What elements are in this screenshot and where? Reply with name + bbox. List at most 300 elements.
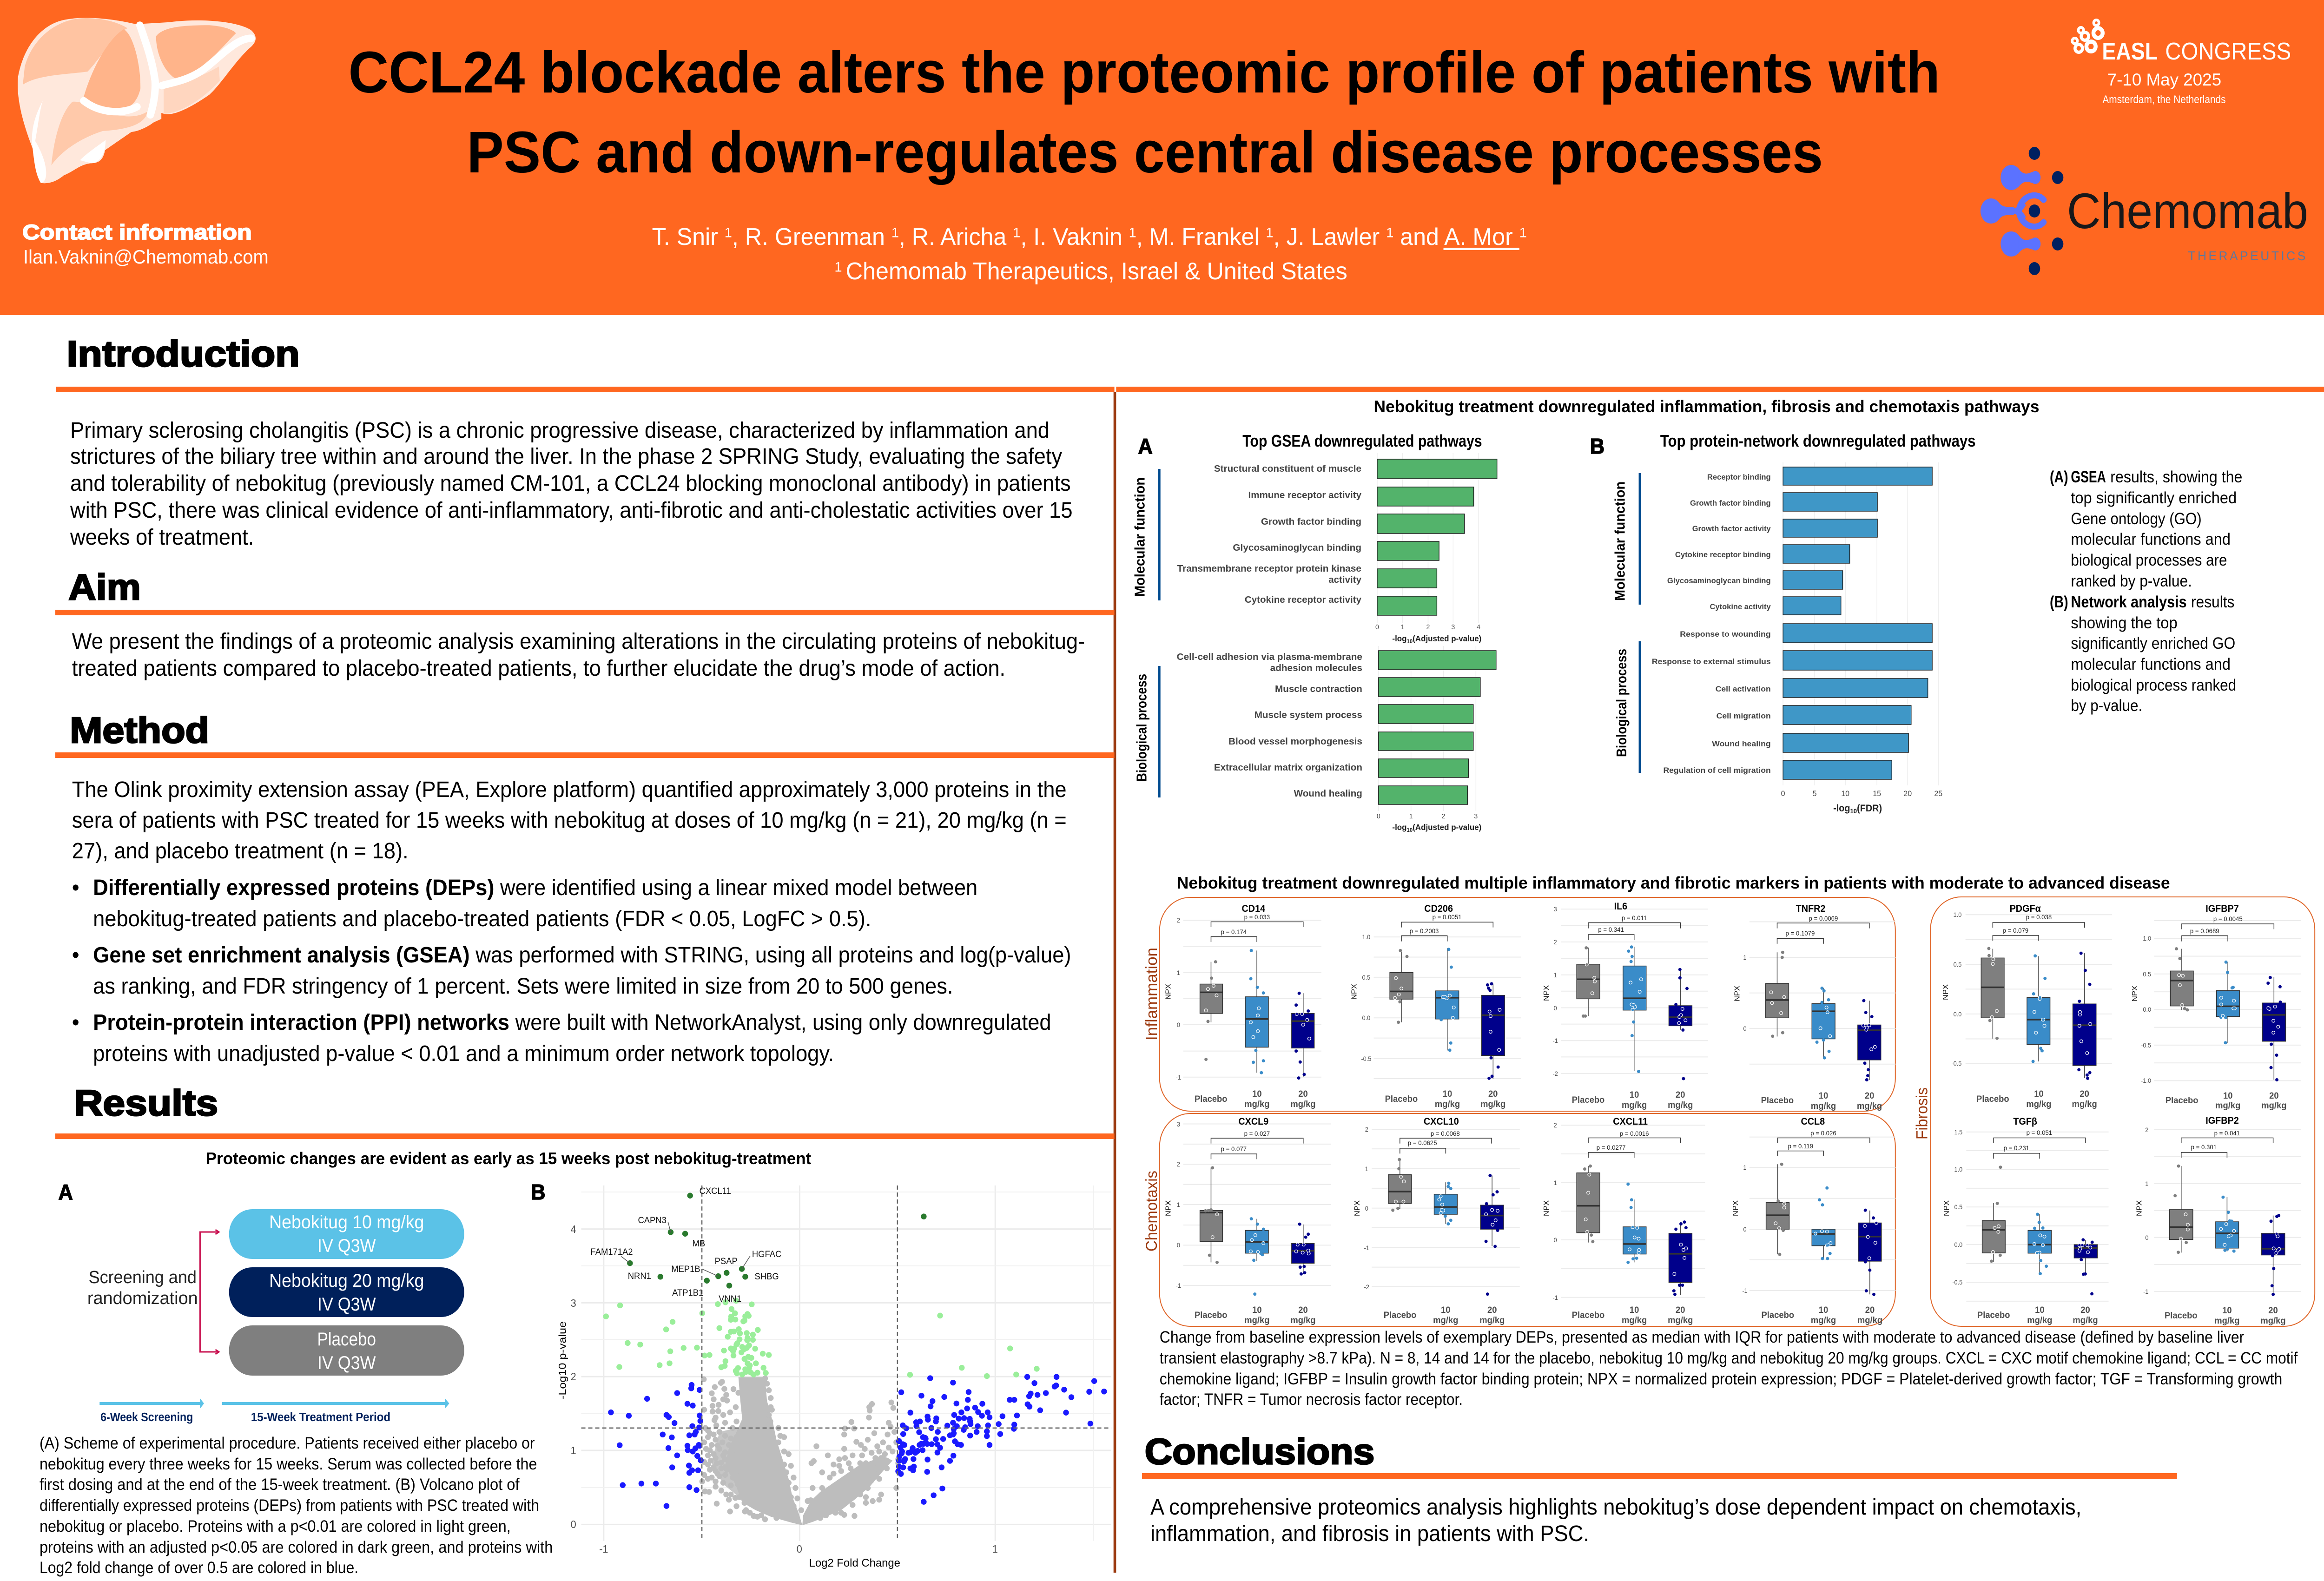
pill: nebokitug 10: Nebokitug 10 mg/kg [269, 1212, 424, 1232]
bars: network: Cytokine activity [1710, 602, 1771, 611]
chart: TNFR2: 20 [1865, 1091, 1874, 1101]
text: panel legend A and B: Gene ontology (GO) [2071, 510, 2202, 528]
volcano labels: ATP1B1 [672, 1288, 703, 1298]
caption: panel A and B: proteins with an adjusted p<0.05 are colored in dark green, and proteins with [40, 1538, 553, 1556]
chart: CCL8: mg/kg [1811, 1316, 1836, 1325]
chart: PDGF alpha: NPX [1941, 984, 1950, 1000]
caption: panel A and B: Log2 fold change of over 0.5 are colored in blue. [40, 1559, 358, 1577]
caption: boxplots: transient elastography >8.7 kPa). N = 8, 14 and 14 for the placebo, nebokitug 10 mg/kg and nebokitug 20 mg/kg groups. CXCL = CXC motif chemokine ligand; CCL = CC motif [1160, 1349, 2298, 1367]
chart: IGFBP7: p = 0.0689 [2190, 928, 2219, 935]
chart: IGFBP7: NPX [2131, 986, 2139, 1001]
Chemomab logo: Chemomab [2067, 183, 2308, 239]
chart: TNFR2: 0 [1743, 1025, 1747, 1032]
chart: CXCL9: -1 [1176, 1282, 1181, 1289]
chart: PDGF alpha: 1.0 [1954, 911, 1961, 918]
chart: CXCL10: 20 [1487, 1305, 1497, 1315]
chart: CXCL10: 1 [1365, 1166, 1368, 1173]
volcano labels: CAPN3 [638, 1216, 667, 1225]
volcano axes [556, 1223, 998, 1569]
chart: PDGF alpha: -0.5 [1951, 1060, 1961, 1067]
heading: introduction: Introduction [66, 334, 300, 374]
chart: CD14: 1 [1177, 969, 1180, 976]
chart: TGF beta: mg/kg [2027, 1316, 2052, 1325]
bars: GSEA molecular function: 10 [1407, 639, 1413, 645]
EASL congress logo [2071, 19, 2291, 105]
chart: CXCL9 [1164, 1117, 1331, 1325]
chart: TNFR2: 1 [1743, 954, 1747, 961]
chart: CCL8 [1731, 1117, 1895, 1325]
chart: CXCL11: mg/kg [1622, 1316, 1647, 1325]
panel: fibrosis [1914, 897, 2315, 1326]
subheading: pathways: Nebokitug treatment downregulated inflammation, fibrosis and chemotaxis pathways [1373, 397, 2039, 416]
text: screening and randomization [87, 1267, 198, 1308]
chart: IGFBP7 [2131, 904, 2301, 1111]
text: panel legend A and B: showing the top [2071, 614, 2178, 632]
text: panel legend A and B: molecular functions and [2071, 655, 2231, 673]
side label: biological process: Biological process [1614, 649, 1630, 757]
chart: PDGF alpha: mg/kg [2072, 1100, 2097, 1109]
bars: network: Growth factor binding [1690, 499, 1771, 507]
text: panel legend A and B: results, showing the [2110, 468, 2242, 486]
Chemomab logo: THERAPEUTICS [2188, 248, 2305, 263]
contact information: Contact information [22, 221, 252, 244]
chart: CD206: mg/kg [1480, 1100, 1505, 1109]
bars: GSEA molecular function: 1 [1401, 624, 1405, 631]
chart: CXCL11: 10 [1630, 1305, 1639, 1315]
panel: chemotaxis [1143, 1113, 1895, 1326]
side label: biological process: Biological process [1134, 674, 1149, 782]
bars: GSEA biological process: 3 [1474, 813, 1478, 820]
chart: IL6: 10 [1630, 1090, 1639, 1100]
chart: TNFR2: mg/kg [1857, 1101, 1882, 1111]
text: screening and randomization: randomization [87, 1288, 198, 1308]
chart: PDGF alpha: p = 0.079 [2003, 927, 2028, 934]
chart: CD206: 1.0 [1362, 934, 1370, 941]
chart: CCL8: mg/kg [1857, 1316, 1882, 1325]
volcano axes: -Log10 p-value [556, 1321, 568, 1399]
bars: GSEA molecular function: Cytokine receptor activity [1245, 595, 1361, 605]
chart: IGFBP2: 2 [2145, 1126, 2148, 1133]
chart: TGF beta: -0.5 [1952, 1279, 1962, 1286]
caption: boxplots: Change from baseline expression levels of exemplary DEPs, presented as median with IQR for patients with moderate to advanced disease (defined by baseline liver [1160, 1328, 2244, 1346]
chart: PDGF alpha: mg/kg [2026, 1100, 2052, 1109]
text: method: sera of patients with PSC treated for 15 weeks with nebokitug at doses of 10 mg/kg (n = 21), 20 mg/kg (n = [72, 808, 1067, 832]
side label: molecular function: Molecular function [1612, 481, 1628, 601]
chart: CD206: CD206 [1424, 904, 1453, 914]
text: panel legend A and B: by p-value. [2071, 697, 2142, 715]
chart: CXCL11: 20 [1676, 1305, 1685, 1315]
bars: GSEA biological process [1177, 646, 1496, 833]
text: method [72, 777, 1071, 1066]
bars: GSEA biological process: -log [1392, 823, 1407, 832]
volcano axes: -1 [599, 1543, 608, 1555]
chart: IGFBP7: Placebo [2166, 1096, 2198, 1106]
section: introduction [56, 334, 1115, 549]
chart: TGF beta: 1.5 [1954, 1129, 1962, 1136]
text: method: The Olink proximity extension assay (PEA, Explore platform) quantified approximately 3,000 proteins in the [72, 777, 1067, 802]
chart: TGF beta [1942, 1117, 2109, 1325]
bars: GSEA biological process: 10 [1407, 827, 1413, 833]
text: method: proteins with unadjusted p-value < 0.01 and a minimum order network topology. [93, 1041, 834, 1066]
section rule: right column [1116, 387, 2324, 392]
bars: GSEA molecular function: 4 [1477, 624, 1480, 631]
authors: 1 Chemomab Therapeutics, Israel & United States [834, 257, 1347, 284]
text: panel legend A and B [2050, 468, 2242, 715]
chart: CXCL10: 10 [1441, 1305, 1450, 1315]
volcano labels: HGFAC [752, 1250, 781, 1259]
bars: GSEA biological process: Muscle system process [1254, 710, 1362, 720]
chart: CCL8: -1 [1742, 1287, 1748, 1294]
caption: panel A and B: first dosing and at the end of the 15-week treatment. (B) Volcano plot of [40, 1476, 520, 1494]
bars: network: 25 [1934, 789, 1942, 798]
bars: GSEA molecular function: Growth factor binding [1261, 517, 1361, 527]
panel B: volcano plot [531, 1181, 1111, 1569]
chart: CD14: NPX [1164, 984, 1172, 1000]
chart: IGFBP2: Placebo [2165, 1311, 2198, 1321]
chart: TNFR2: 10 [1819, 1091, 1828, 1101]
title [348, 40, 1940, 185]
section: aim [55, 567, 1115, 680]
bars: GSEA molecular function: 2 [1426, 624, 1430, 631]
chart: IGFBP7: -0.5 [2141, 1042, 2151, 1049]
bars: GSEA molecular function: Structural constituent of muscle [1214, 464, 1361, 474]
bars: GSEA biological process: (Adjusted p-value) [1413, 823, 1481, 832]
chart: CXCL9: 20 [1298, 1305, 1308, 1315]
caption: panel A and B: nebokitug every three weeks for 15 weeks. Serum was collected before the [40, 1455, 537, 1473]
title: CCL24 blockade alters the proteomic profile of patients with [348, 40, 1940, 105]
section: method [55, 710, 1115, 1066]
heading: method: Method [70, 710, 209, 751]
side label: fibrosis: Fibrosis [1914, 1087, 1931, 1140]
chart: CD14: 0 [1177, 1021, 1180, 1028]
chart: IL6: Placebo [1572, 1095, 1604, 1105]
chart: PDGF alpha: 10 [2034, 1089, 2044, 1099]
bars: network: 10 [1850, 808, 1857, 815]
section: conclusions [1142, 1431, 2177, 1546]
heading: conclusions: Conclusions [1145, 1431, 1374, 1472]
chart: TGF beta: TGFβ [2013, 1117, 2037, 1127]
bars: GSEA biological process: Muscle contraction [1275, 684, 1362, 694]
bars: network: Growth factor activity [1692, 524, 1771, 533]
caption: panel A and B: nebokitug or placebo. Proteins with a p<0.01 are colored in light green, [40, 1517, 511, 1535]
EASL congress logo: 7-10 May 2025 [2107, 70, 2221, 89]
chart: CXCL10: NPX [1353, 1200, 1361, 1216]
chart: IGFBP2: 0 [2145, 1234, 2148, 1241]
panel A: GSEA bars: Top GSEA downregulated pathways [1242, 432, 1482, 450]
chart: CCL8: p = 0.026 [1810, 1130, 1836, 1137]
bars: GSEA biological process: 1 [1409, 813, 1413, 820]
bars: network: Glycosaminoglycan binding [1667, 576, 1771, 585]
chart: IGFBP2 [2135, 1116, 2301, 1326]
bars: network: 20 [1903, 789, 1912, 798]
bars: network: Cytokine receptor binding [1675, 550, 1771, 559]
chart: IGFBP7: p = 0.0045 [2213, 916, 2243, 922]
chart: CXCL9: p = 0.027 [1244, 1130, 1270, 1137]
bars: network: 10 [1841, 789, 1849, 798]
section: results [40, 1083, 1115, 1577]
bars: GSEA biological process: Cell-cell adhesion via plasma-membrane [1177, 652, 1362, 662]
chart: PDGF alpha: PDGFα [2010, 904, 2041, 914]
chart: CD206: 0.5 [1362, 974, 1370, 981]
chart: TNFR2: Placebo [1761, 1096, 1794, 1106]
side label: molecular function [1132, 469, 1161, 600]
subheading: proteomic changes: Proteomic changes are evident as early as 15 weeks post nebokitug-treatment [206, 1149, 812, 1168]
chart: TNFR2: p = 0.1079 [1786, 930, 1815, 937]
caption: boxplots: factor; TNFR = Tumor necrosis factor receptor. [1160, 1390, 1463, 1409]
volcano axes: Log2 Fold Change [809, 1556, 900, 1569]
bars: network: Wound healing [1712, 739, 1771, 748]
chart: PDGF alpha: p = 0.038 [2026, 914, 2052, 921]
volcano labels: VNN1 [719, 1294, 741, 1304]
volcano labels: MB [693, 1239, 705, 1249]
chart: IGFBP2: p = 0.301 [2191, 1144, 2217, 1151]
chart: CXCL11: 0 [1554, 1237, 1557, 1244]
bars: GSEA biological process: Wound healing [1294, 789, 1362, 799]
chart: TNFR2: TNFR2 [1796, 904, 1826, 914]
text: method: Gene set enrichment analysis (GSEA) was performed with STRING, using all proteins and log(p-value) [93, 942, 1071, 967]
bars: GSEA biological process: 2 [1442, 813, 1445, 820]
volcano labels: SHBG [755, 1272, 779, 1282]
panel A: GSEA bars: A [1138, 435, 1153, 458]
chart: IL6: -1 [1553, 1037, 1558, 1044]
text: method: • [72, 1010, 79, 1034]
chart: TGF beta: mg/kg [2073, 1316, 2098, 1325]
bars: GSEA biological process: 0 [1377, 813, 1380, 820]
EASL congress logo: Amsterdam, the Netherlands [2102, 93, 2226, 105]
chart: CXCL11: Placebo [1572, 1311, 1604, 1320]
volcano labels: NRN1 [628, 1271, 651, 1281]
volcano labels [591, 1186, 781, 1304]
chart: CD14: -1 [1176, 1074, 1181, 1081]
icon: liver [18, 18, 256, 183]
bars: network: Cell migration [1717, 711, 1771, 720]
chart: CD206: -0.5 [1361, 1055, 1371, 1062]
chart: CD206: p = 0.0051 [1433, 914, 1461, 921]
chart: IGFBP2: mg/kg [2214, 1316, 2239, 1326]
chart: CXCL10: CXCL10 [1424, 1117, 1459, 1127]
text: conclusions [1150, 1495, 2081, 1546]
chart: IGFBP2: -1 [2143, 1288, 2148, 1295]
chart: IL6: 3 [1554, 906, 1557, 913]
chart: CXCL10 [1353, 1117, 1520, 1325]
pill: nebokitug 10 [229, 1209, 464, 1259]
text: panel legend A and B: biological processes are [2071, 551, 2227, 569]
authors: T. Snir 1, R. Greenman 1, R. Aricha 1, I. Vaknin 1, M. Frankel 1, J. Lawler 1 and A. Mor 1 [652, 223, 1527, 250]
chart: CD206: Placebo [1385, 1094, 1418, 1104]
chart: CXCL10: -2 [1364, 1284, 1369, 1291]
chart: IGFBP2: mg/kg [2260, 1316, 2286, 1326]
chart: TGF beta: p = 0.231 [2004, 1145, 2029, 1152]
text: aim [72, 629, 1085, 680]
chart: CD14: CD14 [1241, 904, 1266, 914]
chart: PDGF alpha: 0.0 [1954, 1011, 1961, 1018]
chart: CXCL10: 0 [1365, 1205, 1368, 1212]
chart: IL6: 20 [1676, 1090, 1685, 1100]
chart: CXCL9: 1 [1177, 1201, 1180, 1208]
chart: TGF beta: p = 0.051 [2027, 1129, 2052, 1136]
chart: IGFBP2: IGFBP2 [2205, 1116, 2239, 1126]
EASL congress logo: EASL [2102, 38, 2158, 65]
chart: CD206: 10 [1443, 1089, 1452, 1099]
heading: aim: Aim [68, 567, 141, 607]
text: introduction: Primary sclerosing cholangitis (PSC) is a chronic progressive disease, characterized by inflammation and [70, 418, 1050, 442]
chart: CXCL9: CXCL9 [1238, 1117, 1268, 1127]
chart: CXCL11: p = 0.0277 [1597, 1144, 1626, 1151]
side label: molecular function: Molecular function [1132, 477, 1148, 597]
text: introduction: strictures of the biliary tree within and around the liver. In the phase 2 SPRING Study, evaluating the safety [70, 444, 1063, 468]
bars: network: Receptor binding [1707, 473, 1771, 481]
chart: IGFBP7: 20 [2269, 1091, 2279, 1101]
bars: GSEA molecular function: -log [1392, 634, 1407, 643]
text: conclusions: inflammation, and fibrosis in patients with PSC. [1150, 1521, 1589, 1546]
bars: network: (FDR) [1857, 804, 1882, 814]
chart: PDGF alpha: 0.5 [1954, 961, 1961, 968]
chart: IGFBP7: mg/kg [2261, 1101, 2286, 1111]
text: aim: We present the findings of a proteomic analysis examining alterations in the circulating proteins of nebokitug- [72, 629, 1085, 653]
panel A: GSEA bars [1132, 432, 1497, 833]
chart: CCL8: 0 [1743, 1226, 1747, 1233]
bars: GSEA biological process: adhesion molecules [1270, 663, 1362, 673]
chart: CXCL11 [1542, 1117, 1705, 1325]
bars: network: 15 [1873, 789, 1881, 798]
chart: TGF beta: Placebo [1977, 1311, 2010, 1320]
text: conclusions: A comprehensive proteomics analysis highlights nebokitug’s dose dependent impact on chemotaxis, [1150, 1495, 2081, 1519]
bars: network: 5 [1813, 789, 1817, 798]
volcano axes: 1 [571, 1444, 576, 1456]
chart: CD14: p = 0.174 [1221, 929, 1247, 935]
heading: results: Results [74, 1083, 218, 1123]
bars: network: Cell activation [1716, 685, 1771, 693]
volcano labels: PSAP [715, 1257, 738, 1266]
volcano axes: 0 [797, 1543, 802, 1555]
chart: IGFBP7: mg/kg [2215, 1101, 2240, 1111]
volcano labels: MEP1B [671, 1265, 700, 1274]
chart: TGF beta: 0.5 [1954, 1204, 1962, 1211]
chart: CD206: p = 0.2003 [1410, 928, 1439, 935]
pill: nebokitug 10: IV Q3W [317, 1236, 376, 1256]
chart: IL6: IL6 [1614, 902, 1627, 912]
chart: IL6 [1542, 902, 1708, 1110]
bars: network: Response to wounding [1680, 630, 1771, 639]
chart: CD14: mg/kg [1244, 1100, 1269, 1109]
chart: CXCL10: mg/kg [1433, 1316, 1458, 1325]
chart: TGF beta: 0.0 [1954, 1241, 1962, 1248]
chart: CXCL9: NPX [1164, 1200, 1172, 1216]
caption: boxplots [1160, 1328, 2298, 1409]
text: method: Differentially expressed proteins (DEPs) were identified using a linear mixed model between [93, 875, 977, 900]
chart: CXCL9: p = 0.077 [1221, 1146, 1247, 1153]
title: PSC and down-regulates central disease processes [467, 119, 1823, 185]
chart: CXCL11: 1 [1554, 1179, 1557, 1186]
text: panel legend A and B: (A) [2050, 468, 2068, 486]
bars: GSEA molecular function: (Adjusted p-value) [1413, 634, 1481, 643]
chart: IL6: 2 [1554, 939, 1557, 946]
volcano grid and points [581, 1186, 1111, 1541]
chart: CXCL9: 0 [1177, 1242, 1180, 1249]
chart: IGFBP2: p = 0.041 [2214, 1130, 2240, 1137]
pill: nebokitug 20: Nebokitug 20 mg/kg [269, 1271, 424, 1291]
chart: CD14: p = 0.033 [1244, 914, 1270, 921]
bars: GSEA molecular function: Transmembrane receptor protein kinase [1177, 564, 1361, 574]
chart: IL6: p = 0.011 [1622, 915, 1647, 922]
chart: CD206: NPX [1350, 984, 1359, 1000]
chart: TNFR2: p = 0.0069 [1809, 915, 1838, 922]
chart: CXCL11: p = 0.0016 [1620, 1130, 1649, 1137]
chart: CCL8: p = 0.119 [1788, 1143, 1813, 1150]
chart: TGF beta: 1.0 [1954, 1166, 1962, 1173]
caption: panel A and B: differentially expressed proteins (DEPs) from patients with PSC treated with [40, 1496, 539, 1515]
chart: IGFBP7: 1.0 [2143, 935, 2151, 942]
text: panel legend A and B: (B) [2050, 593, 2068, 611]
timeline arrows: 15-Week Treatment Period [251, 1410, 390, 1424]
chart: CD14: Placebo [1195, 1094, 1228, 1104]
text: panel legend A and B: top significantly enriched [2071, 489, 2237, 507]
chart: CXCL11: NPX [1542, 1200, 1551, 1216]
chart: CD206: 20 [1488, 1089, 1498, 1099]
side label: inflammation: Inflammation [1143, 948, 1161, 1041]
chart: CXCL9: 10 [1252, 1305, 1262, 1315]
chart: IL6: 0 [1554, 1005, 1557, 1012]
panel A: study scheme [59, 1181, 464, 1424]
pill: nebokitug 20: IV Q3W [317, 1294, 376, 1315]
panel B: protein network bars: Top protein-network downregulated pathways [1660, 432, 1976, 450]
chart: CXCL10: 2 [1365, 1126, 1368, 1133]
text: method: as ranking, and FDR stringency of 1 percent. Sets were limited in size from 20 to 500 genes. [93, 974, 953, 998]
chart: CXCL10: Placebo [1384, 1311, 1416, 1320]
chart: IGFBP7: -1.0 [2141, 1077, 2151, 1084]
panel B: volcano plot: B [531, 1181, 546, 1204]
bars: GSEA molecular function: Glycosaminoglycan binding [1233, 543, 1361, 553]
chart: TNFR2: NPX [1733, 986, 1742, 1001]
text: introduction: weeks of treatment. [70, 525, 254, 549]
volcano labels: FAM171A2 [591, 1247, 633, 1257]
column divider [1114, 392, 1116, 1573]
volcano axes: 1 [992, 1543, 998, 1555]
chart: TGF beta: 20 [2080, 1305, 2090, 1315]
chart: IL6: p = 0.341 [1598, 926, 1624, 933]
chart: IL6: -2 [1553, 1070, 1558, 1077]
contact information: Ilan.Vaknin@Chemomab.com [23, 246, 269, 268]
bars: network: Regulation of cell migration [1663, 766, 1771, 775]
pill: nebokitug 20 [229, 1267, 464, 1317]
chart: CXCL9: 3 [1177, 1121, 1180, 1128]
bars: GSEA molecular function: 3 [1451, 624, 1455, 631]
text: aim: treated patients compared to placebo-treated patients, to further elucidate the drug’s mode of action. [72, 656, 1005, 680]
header banner [0, 0, 2324, 315]
volcano labels: CXCL11 [700, 1186, 731, 1196]
text: panel legend A and B: molecular functions and [2071, 530, 2231, 548]
chart: TGF beta: NPX [1942, 1200, 1951, 1216]
authors [652, 223, 1527, 284]
chart: IGFBP7: 0.0 [2143, 1006, 2151, 1013]
chart: CD14: 20 [1298, 1089, 1308, 1099]
chart: CD206: mg/kg [1435, 1100, 1460, 1109]
panel: inflammation [1143, 897, 1895, 1111]
chart: IL6: 1 [1554, 972, 1557, 979]
chart: CCL8: 10 [1819, 1305, 1828, 1315]
volcano axes: 0 [571, 1518, 576, 1530]
chart: IL6: mg/kg [1622, 1100, 1647, 1110]
chart: PDGF alpha [1941, 904, 2112, 1109]
chart: CD14 [1164, 904, 1321, 1109]
caption: panel A and B [40, 1434, 553, 1577]
chart: IGFBP7: IGFBP7 [2205, 904, 2239, 914]
chart: CXCL11: mg/kg [1668, 1316, 1693, 1325]
side label: biological process [1134, 666, 1161, 797]
text: method: nebokitug-treated patients and placebo-treated patients (FDR < 0.05, LogFC > 0.5). [93, 906, 871, 931]
chart: CCL8: 20 [1865, 1305, 1875, 1315]
chart: IGFBP2: 20 [2268, 1306, 2278, 1316]
